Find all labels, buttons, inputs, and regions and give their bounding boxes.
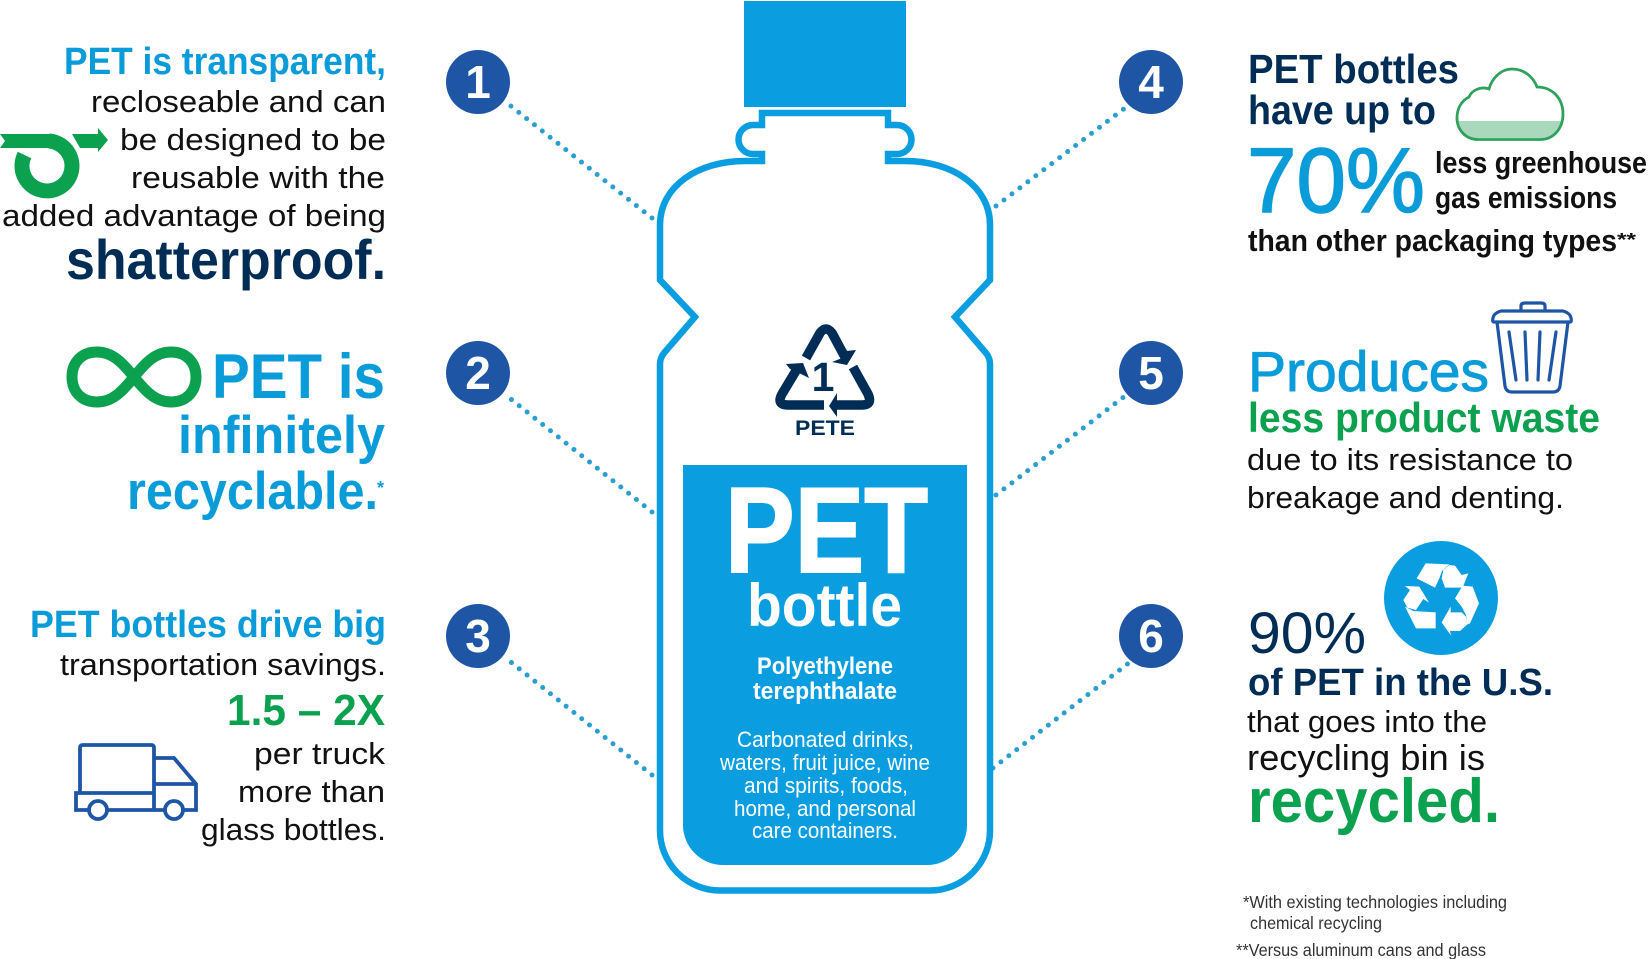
uses description: Carbonated drinks,: [737, 727, 914, 752]
panel 1: transparent and shatterproof: [0, 41, 386, 291]
heading: infinitely: [178, 406, 385, 465]
body text: more than: [238, 774, 385, 809]
uses description: waters, fruit juice, wine: [719, 750, 930, 775]
number badge 3: 3: [465, 610, 491, 662]
dotted connector lines: [507, 103, 1130, 775]
heading: [1248, 46, 1459, 133]
label subtitle bottle: bottle: [747, 572, 902, 639]
body text: glass bottles.: [201, 812, 386, 847]
panel 2: infinitely recyclable: [72, 342, 385, 521]
panel 3: transportation savings: [30, 604, 386, 847]
body text: recycling bin is: [1247, 737, 1485, 778]
stat caption: **: [1617, 230, 1636, 250]
uses description: [719, 727, 930, 843]
body text: breakage and denting.: [1247, 480, 1564, 515]
icon: infinity loop: [72, 352, 196, 402]
recycling code symbol: [780, 329, 870, 440]
footnotes: *With existing technologies including: [1243, 892, 1507, 912]
stat 70%: 70%: [1247, 130, 1425, 232]
icon: truck: [76, 745, 196, 819]
heading: [127, 342, 385, 521]
chemical name: Polyethylene: [757, 653, 893, 680]
icon: recycling badge: [1384, 541, 1498, 655]
body text: due to its resistance to: [1247, 442, 1573, 477]
body text: be designed to be: [120, 122, 386, 157]
stat: 1.5 – 2X: [227, 686, 385, 735]
chemical name: [753, 653, 897, 705]
body text line: transportation savings.: [60, 647, 386, 682]
emphasis word: recycled.: [1248, 767, 1500, 836]
footnotes: chemical recycling: [1250, 913, 1382, 933]
body text: reusable with the: [131, 160, 385, 195]
number badge 5: [1119, 341, 1183, 405]
footnotes: [1236, 892, 1507, 959]
icon: reuse loop arrow: [0, 128, 108, 191]
bottle outline: [660, 113, 990, 891]
chemical name: terephthalate: [753, 678, 897, 705]
body text: per truck: [254, 736, 386, 771]
body text: [201, 736, 386, 847]
body text: [2, 84, 386, 233]
body text: that goes into the: [1247, 704, 1487, 739]
panel 5: less product waste: [1247, 303, 1600, 515]
heading: recyclable.: [127, 462, 378, 521]
number badge 6: 6: [1138, 610, 1164, 662]
heading: PET bottles drive big: [30, 604, 386, 646]
bottle cap: [744, 1, 906, 107]
panel 4: greenhouse gas: [1247, 46, 1647, 258]
number badge 1: [446, 50, 510, 114]
blue label panel: [683, 465, 967, 865]
subheading: of PET in the U.S.: [1248, 662, 1553, 704]
stat 90%: 90%: [1248, 601, 1366, 666]
number badge 1: 1: [465, 56, 491, 108]
label title PET: PET: [725, 462, 928, 598]
number badge 6: [1119, 604, 1183, 668]
stat caption: gas emissions: [1435, 180, 1617, 215]
heading: PET is: [212, 342, 385, 412]
stat caption: than other packaging types: [1248, 223, 1617, 258]
body text: [1247, 442, 1573, 515]
icon: cloud: [1457, 69, 1563, 140]
icon: trash can: [1493, 303, 1571, 392]
panel 6: 90% recycled: [1247, 541, 1553, 836]
emphasis word: shatterproof.: [66, 228, 386, 291]
number badge 2: 2: [465, 347, 491, 399]
heading: Produces: [1248, 340, 1489, 404]
body text: [1247, 704, 1487, 778]
number badge 4: 4: [1138, 56, 1164, 108]
uses description: and spirits, foods,: [744, 773, 908, 798]
number badge 3: [446, 604, 510, 668]
body text: added advantage of being: [2, 198, 386, 233]
subheading: less product waste: [1248, 394, 1600, 441]
uses description: home, and personal: [734, 796, 916, 821]
body text: recloseable and can: [91, 84, 386, 119]
heading: *: [377, 478, 384, 498]
bottle illustration: [660, 1, 990, 891]
stat caption: [1248, 145, 1647, 258]
heading: have up to: [1248, 87, 1436, 133]
uses description: care containers.: [752, 818, 898, 843]
heading: PET is transparent,: [64, 41, 386, 83]
PETE label: PETE: [795, 417, 855, 440]
heading: PET bottles: [1248, 46, 1459, 92]
recycling code symbol: 1: [812, 354, 834, 400]
number badge 4: [1119, 50, 1183, 114]
number badge 2: [446, 341, 510, 405]
number badge 5: 5: [1138, 347, 1164, 399]
